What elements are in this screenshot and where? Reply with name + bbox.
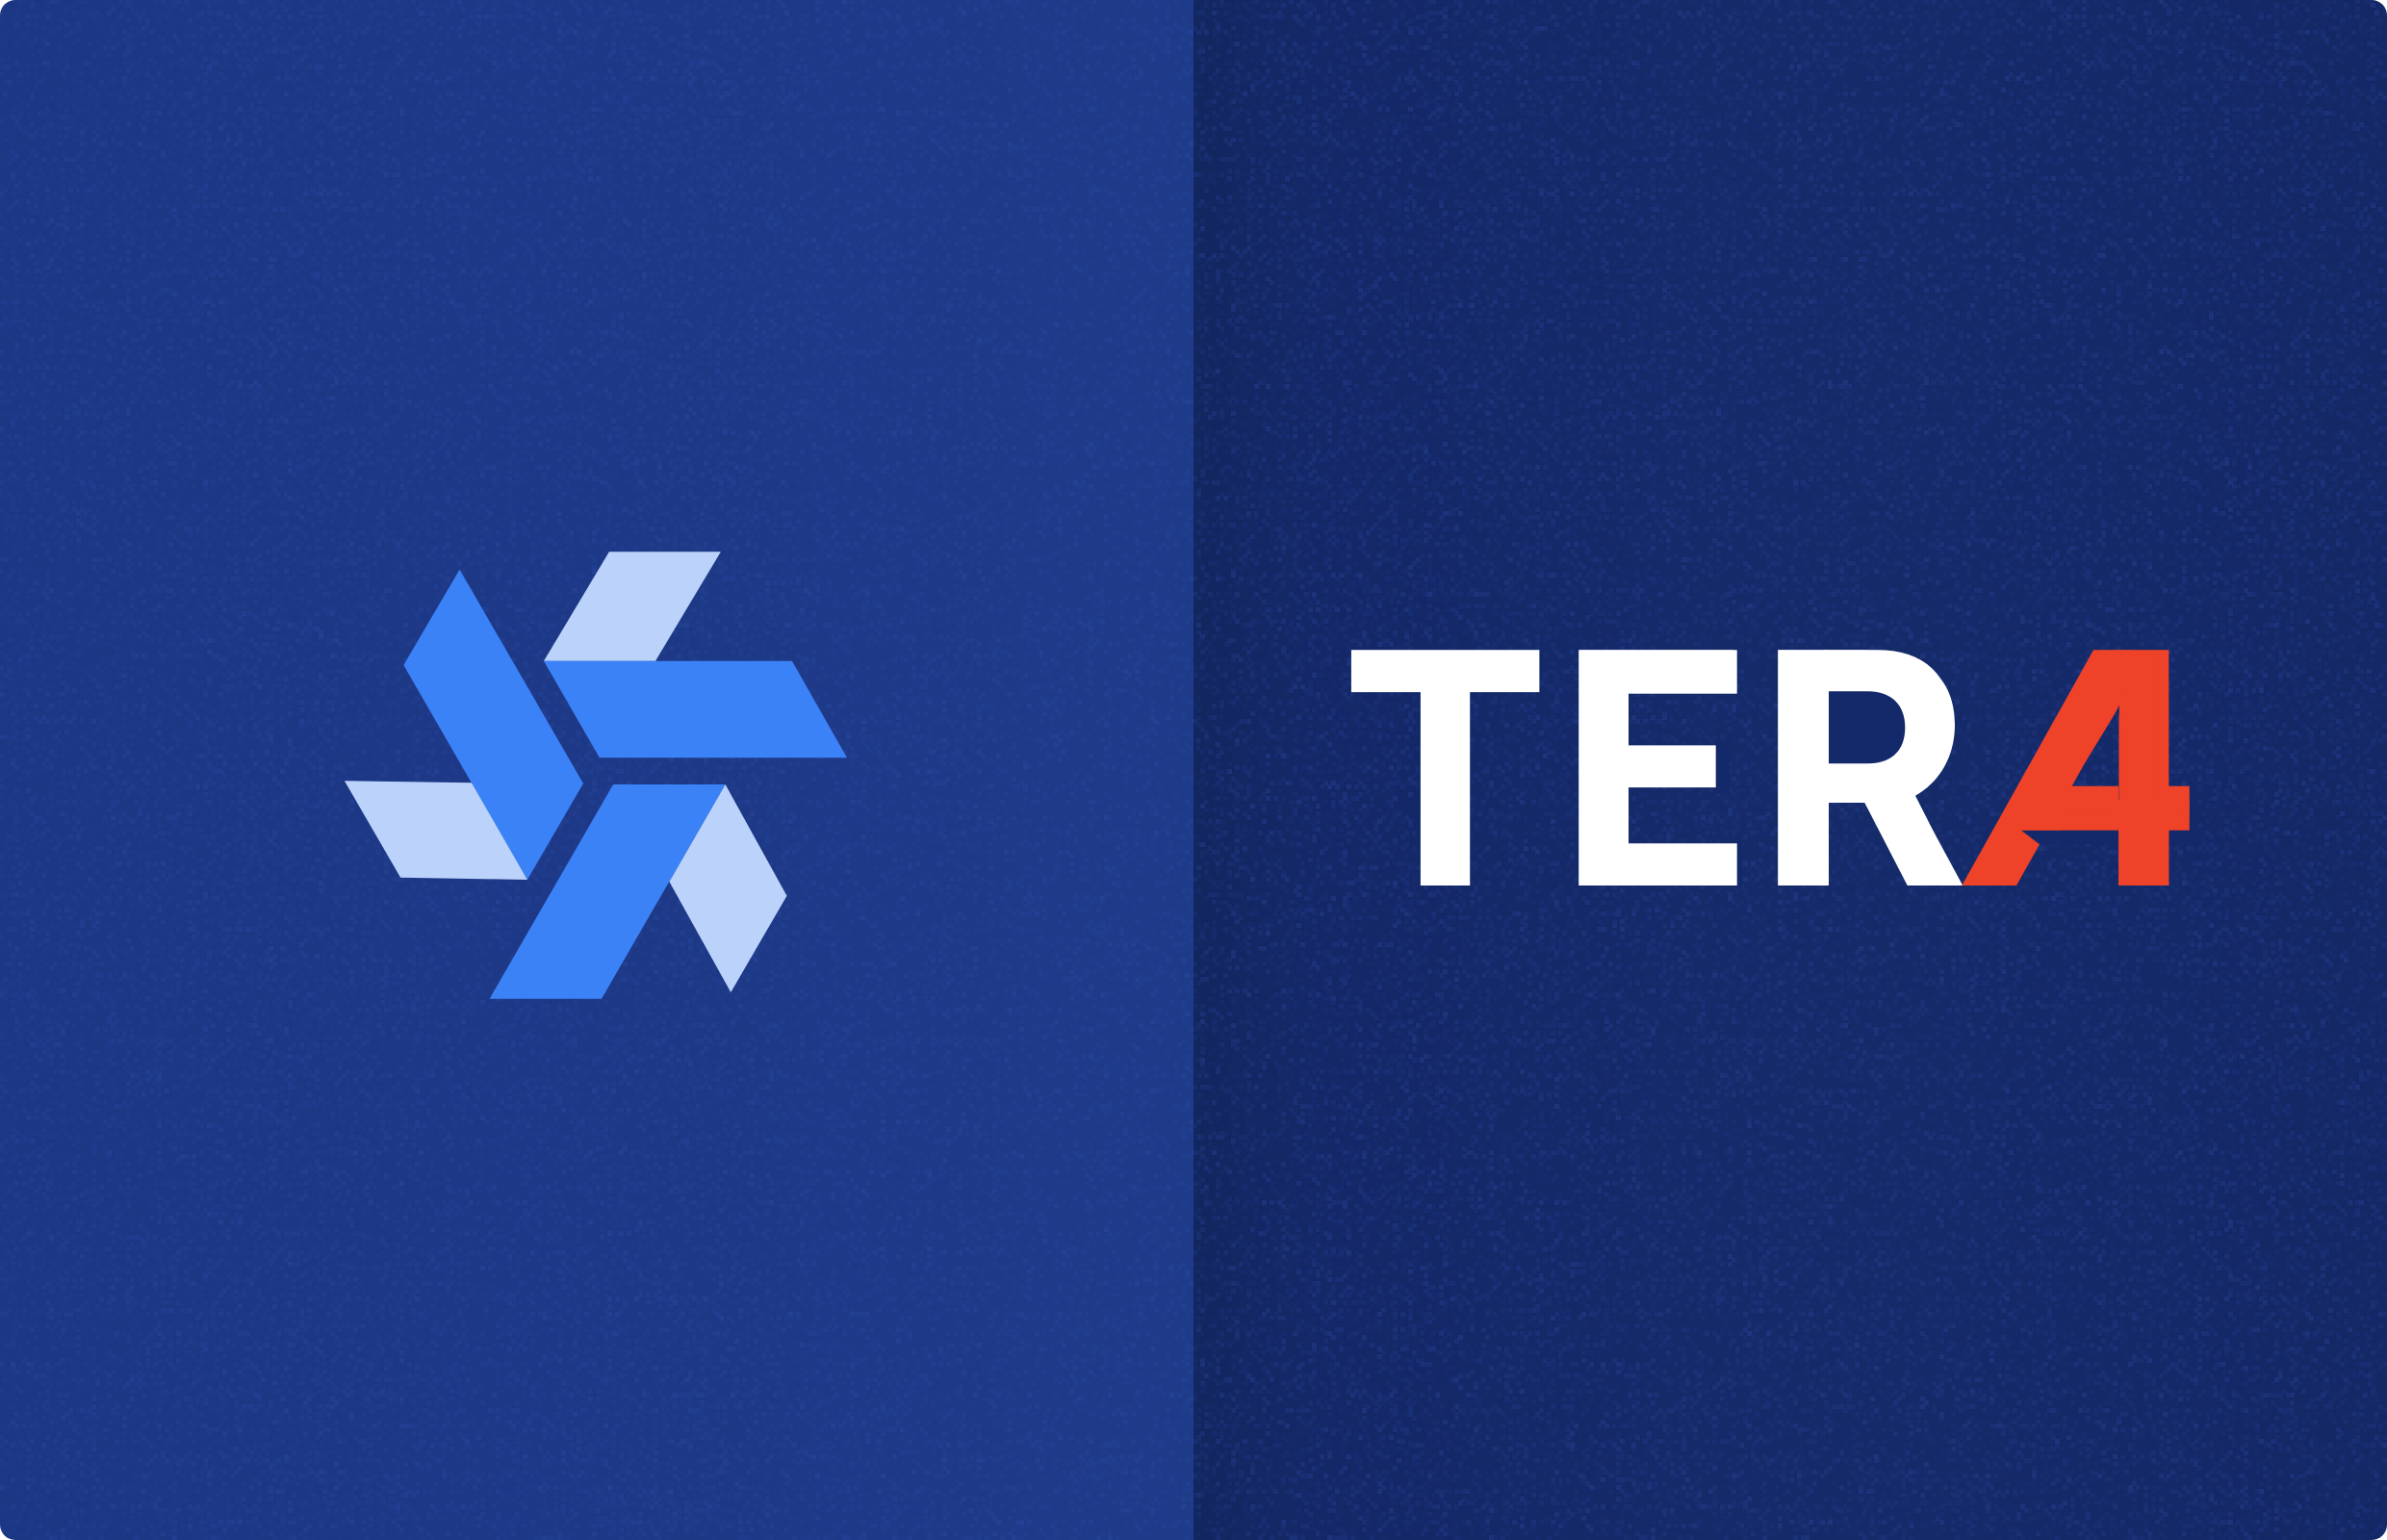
panel: left	[0, 0, 1194, 1540]
wordmark: TERA4: T	[1350, 580, 1541, 955]
wordmark: TERA4: R	[1761, 581, 1964, 955]
wordmark: TERA4	[1350, 579, 2198, 955]
icon: pinwheel logo	[345, 552, 847, 999]
wordmark: TERA4: E	[1562, 579, 1748, 955]
wordmark: TERA4: 4	[2018, 580, 2194, 955]
panel: right	[1194, 0, 2387, 1540]
